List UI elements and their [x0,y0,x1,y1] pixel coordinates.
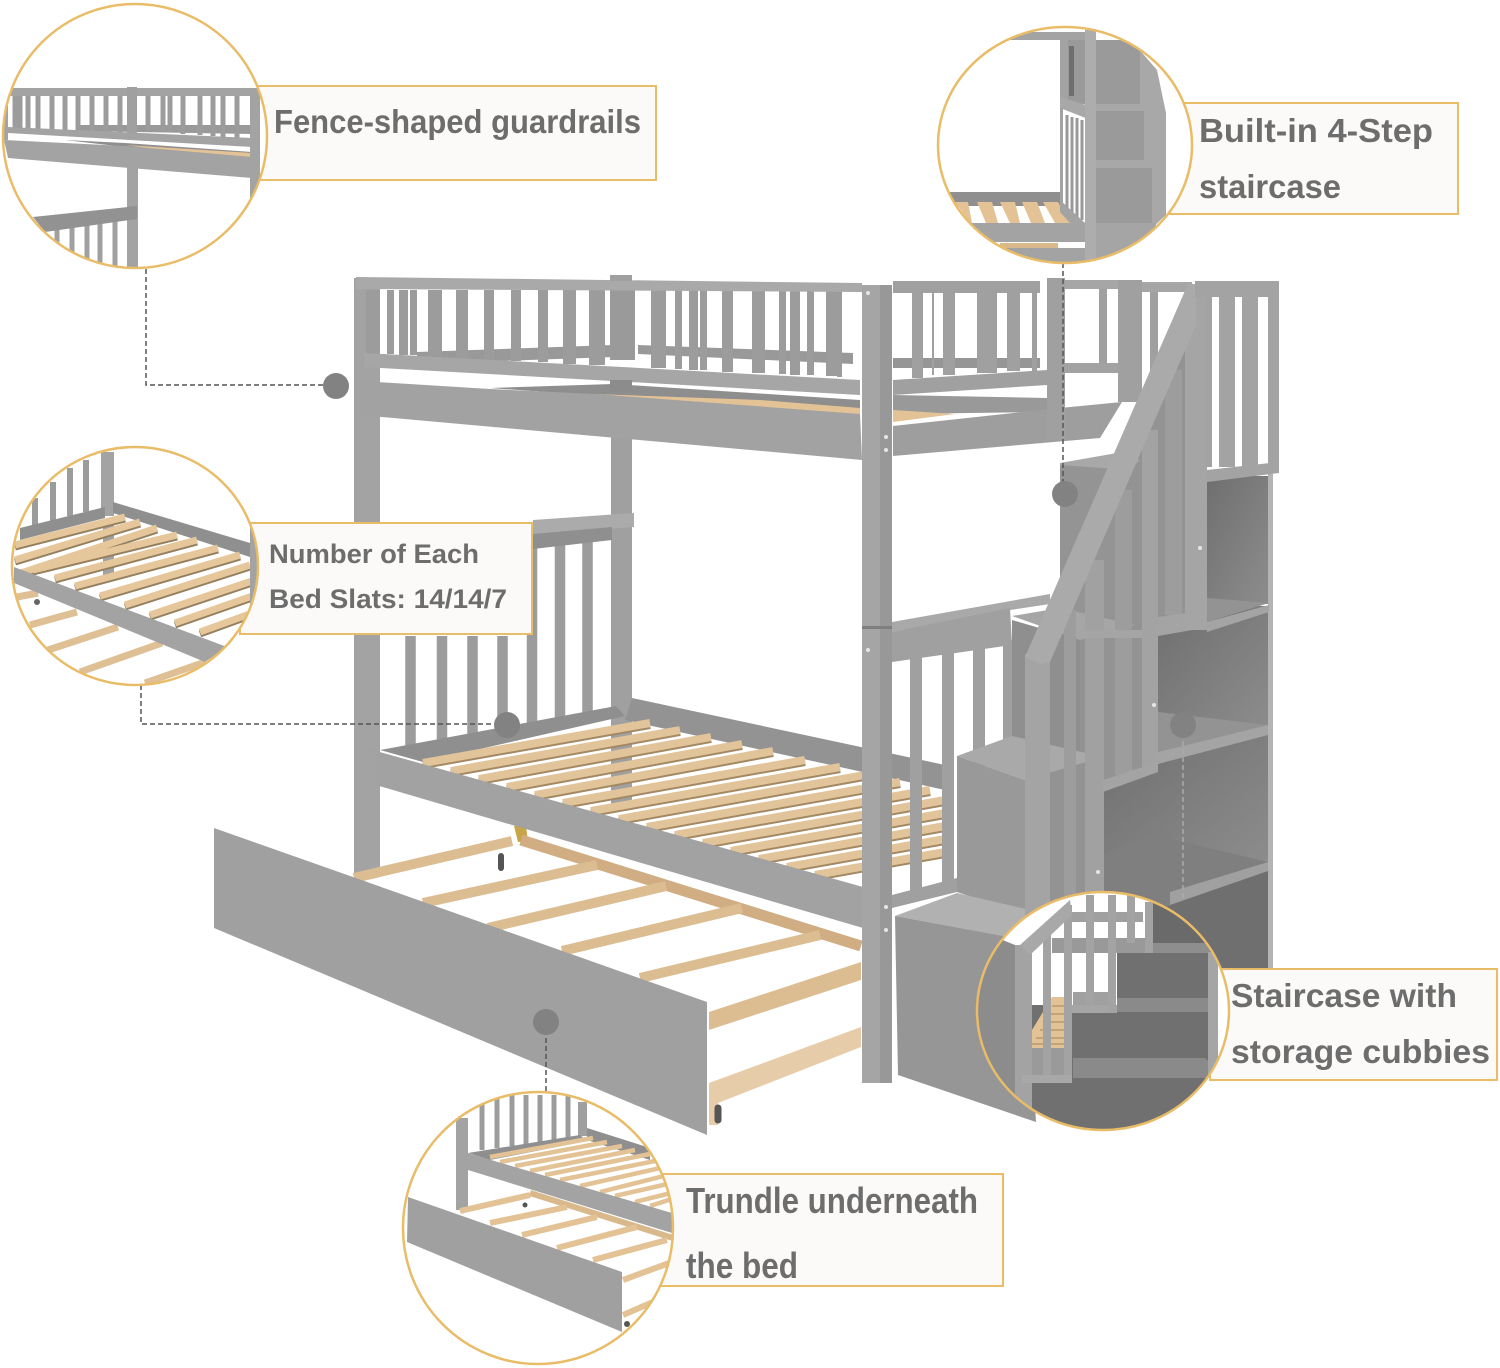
lower end guard panel by the stairs [892,594,1050,908]
pointer: staircase dashed leader [1052,263,1078,507]
storage tower dark cubbies [1103,474,1273,975]
label box: staircase: Built-in 4-Step [1199,112,1433,149]
callout: fence-shaped guardrails [0,4,656,270]
pointer: guardrails dashed leader [146,269,349,399]
pointer: cubbies dashed leader [1170,712,1196,900]
callout: staircase with storage cubbies [977,880,1497,1130]
illustration: bunk bed with staircase and trundle [214,275,1279,1135]
label box: slats [240,523,532,634]
top right end guard [1195,281,1279,482]
pointer: slats dashed leader [141,685,520,738]
trundle wooden frame [354,826,861,1125]
label box: cubbies: storage cubbies [1231,1033,1490,1070]
label box: slats: Bed Slats: 14/14/7 [269,584,507,614]
trundle front panel [214,828,707,1135]
label box: trundle: the bed [686,1245,798,1286]
label box: staircase: staircase [1199,168,1341,205]
pointer: trundle dashed leader [533,1009,559,1092]
label box: staircase [1170,103,1458,214]
lower bed front side rail [369,749,863,928]
upper bunk guardrail and side rail [356,275,862,460]
upper bunk right section guardrail [893,278,1192,456]
detail circle: slats [12,447,263,685]
detail circle: guardrails [0,4,267,270]
staircase steps [895,300,1192,1122]
tall front right post [862,285,892,1083]
lower bed headboard and rear posts [354,278,945,875]
callout: built-in 4-step staircase [938,27,1458,268]
detail circle: trundle [403,1092,675,1364]
label box: guardrails: Fence-shaped guardrails [274,103,641,140]
callout: number of bed slats [12,447,532,685]
callout: trundle underneath the bed [403,1092,1003,1364]
detail circle: cubbies [977,880,1240,1130]
detail circle: staircase [938,27,1192,268]
label box: cubbies: Staircase with [1231,977,1457,1014]
label box: trundle [650,1174,1003,1286]
label box: slats: Number of Each [269,539,479,569]
label box: trundle: Trundle underneath [686,1180,978,1221]
label box: cubbies [1210,969,1497,1080]
label box: guardrails [250,86,656,180]
staircase handrail and balusters [1025,284,1207,924]
lower bed wooden slats [423,723,945,877]
